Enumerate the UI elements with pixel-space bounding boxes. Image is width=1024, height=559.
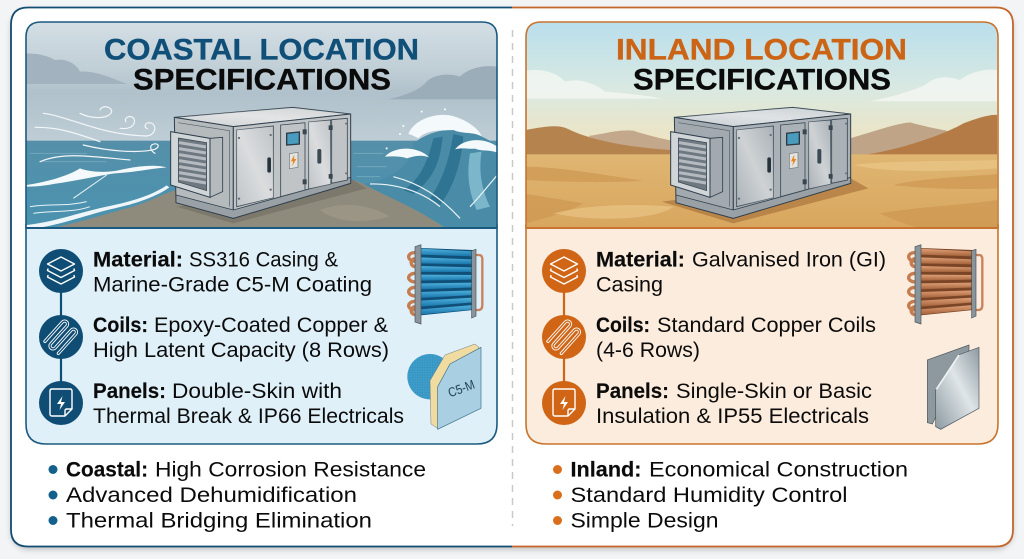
coastal heading [104, 34, 419, 96]
icon: coil [542, 315, 586, 359]
text: coils: Coils: [596, 314, 650, 337]
text: panels: Panels: [596, 380, 669, 403]
icon: double-skin panel [407, 344, 481, 429]
text: material: SS316 Casing & [189, 248, 338, 272]
coastal AHU unit [171, 107, 351, 218]
text: coils [93, 314, 389, 362]
inland heading [616, 34, 907, 96]
inland takeaways: Inland: [570, 458, 642, 482]
text: material: Material: [93, 248, 183, 272]
text: panels: Thermal Break & IP66 Electricals [93, 405, 404, 428]
text: coils [596, 314, 876, 362]
inland takeaways [553, 458, 908, 532]
coastal takeaways: Thermal Bridging Elimination [66, 510, 372, 532]
text: material: Galvanised Iron (GI) [692, 248, 886, 272]
text: coils: (4-6 Rows) [596, 339, 700, 362]
inland AHU unit [671, 107, 851, 218]
text: panels: Panels: [93, 380, 166, 403]
coastal takeaways [48, 458, 426, 532]
coastal takeaways: Advanced Dehumidification [66, 484, 357, 507]
icon: double-skin panel: C5-M [446, 377, 477, 400]
text: material [596, 248, 886, 296]
text: material: Casing [596, 274, 663, 296]
icon: epoxy coated coil [409, 245, 482, 324]
icon: coil [39, 315, 83, 359]
inland takeaways: Economical Construction [649, 458, 908, 482]
inland connector [563, 271, 565, 403]
right wave [363, 129, 497, 230]
text: coils: High Latent Capacity (8 Rows) [93, 339, 389, 362]
inland takeaways: Simple Design [570, 510, 718, 532]
icon: copper coil [909, 245, 982, 324]
coastal heading: COASTAL LOCATION [104, 34, 419, 66]
inland panel outline [526, 22, 998, 228]
text: material: Material: [596, 248, 685, 272]
wind swirls [35, 107, 158, 162]
text: coils: Standard Copper Coils [657, 314, 876, 337]
panel: inland [526, 22, 998, 532]
coastal takeaways: Coastal: [66, 458, 148, 482]
text: coils: Coils: [93, 314, 148, 337]
text: material [93, 248, 372, 296]
icon: panel document [39, 381, 83, 425]
left foam [27, 166, 167, 187]
text: material: Marine-Grade C5-M Coating [93, 274, 372, 296]
text: panels [596, 380, 872, 428]
coastal panel outline [26, 22, 497, 228]
inland scene illustration [526, 22, 997, 229]
panel: coastal [26, 22, 497, 532]
ground [56, 180, 444, 227]
text: coils: Epoxy-Coated Copper & [154, 314, 388, 337]
coastal takeaways: High Corrosion Resistance [155, 458, 426, 482]
AHU shadow [662, 178, 868, 223]
text: panels: Insulation & IP55 Electricals [596, 405, 869, 428]
text: panels: Single-Skin or Basic [676, 380, 872, 403]
inland panel body [526, 225, 998, 444]
inland takeaways: Standard Humidity Control [570, 484, 848, 507]
text: panels: Double-Skin with [172, 380, 342, 403]
center dashed divider [512, 30, 514, 526]
icon: layers [39, 249, 83, 293]
inland heading: SPECIFICATIONS [633, 64, 891, 96]
icon: panel document [542, 381, 586, 425]
coastal heading: SPECIFICATIONS [133, 64, 391, 96]
AHU shadow [177, 178, 367, 223]
coastal connector [60, 271, 62, 403]
icon: layers [542, 249, 586, 293]
coastal panel body [26, 225, 497, 444]
icon: single-skin panel [927, 345, 979, 429]
coastal scene illustration [26, 22, 497, 230]
text: panels [93, 380, 404, 428]
inland heading: INLAND LOCATION [616, 34, 907, 66]
